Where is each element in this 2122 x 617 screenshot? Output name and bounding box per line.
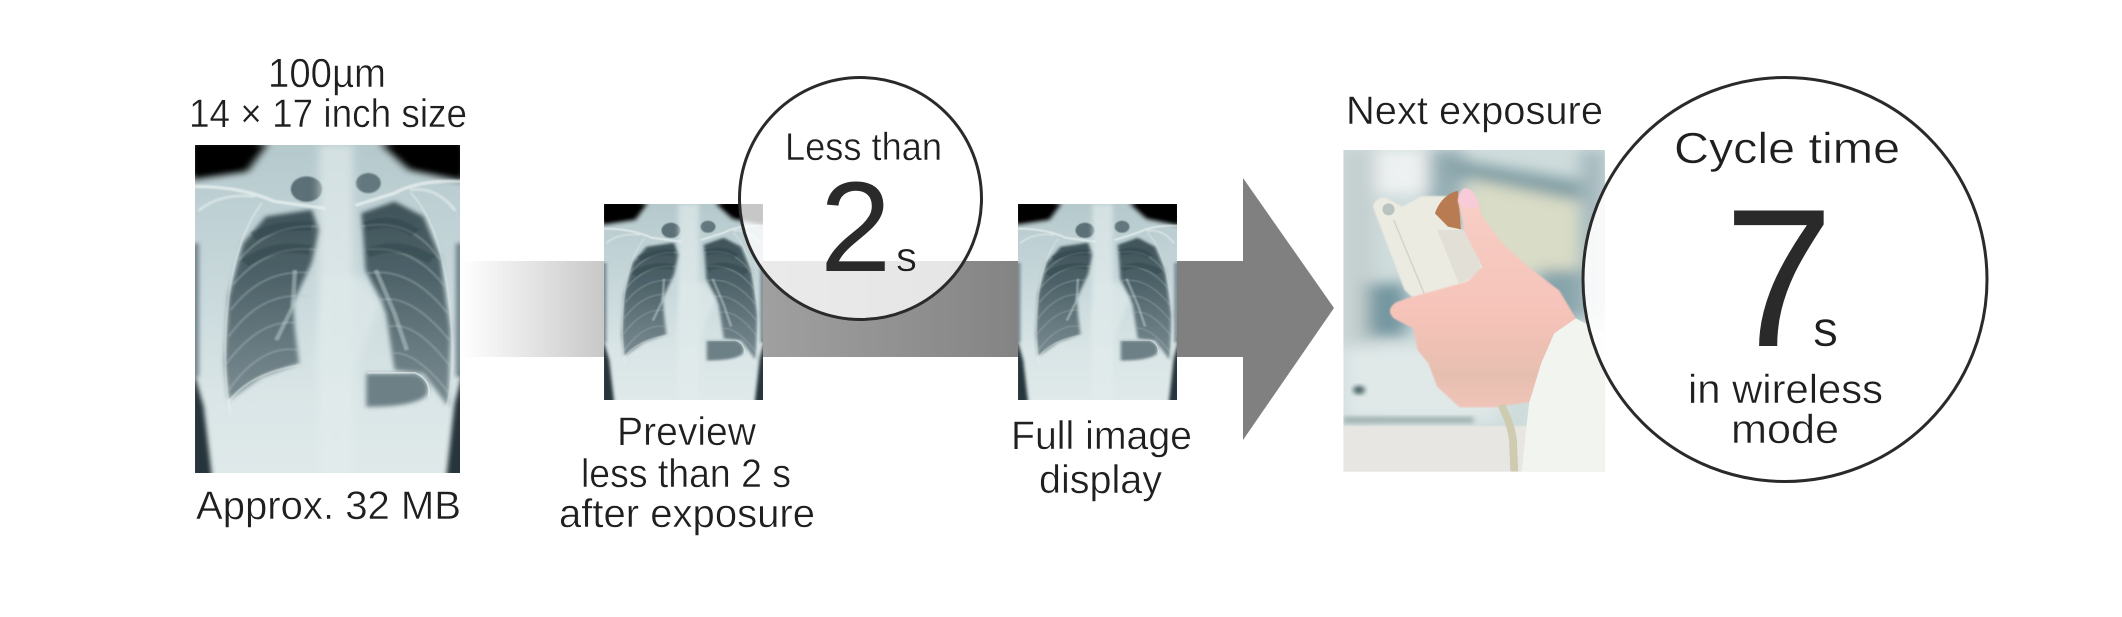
callout: less than 2 s: [740, 78, 982, 320]
callout: less than 2 s: Less than: [785, 126, 942, 169]
callout: cycle time 7 s in wireless mode: [1583, 78, 1987, 482]
image: hand holding wireless exposure switch: [1343, 150, 1605, 472]
callout: cycle time 7 s in wireless mode: in wireless: [1688, 366, 1883, 412]
heading: resolution and size: 14 × 17 inch size: [189, 92, 467, 136]
label: file size: Approx. 32 MB: [196, 484, 461, 528]
callout: cycle time 7 s in wireless mode: s: [1813, 301, 1838, 357]
arrow: progress bar with gradient: [461, 178, 1334, 440]
label: preview: [559, 410, 815, 536]
heading: resolution and size: [189, 50, 467, 136]
callout: cycle time 7 s in wireless mode: Cycle time: [1674, 124, 1900, 173]
callout: cycle time 7 s in wireless mode: mode: [1731, 406, 1839, 452]
label: preview: Preview: [617, 410, 756, 454]
label: full image display: [1011, 414, 1192, 502]
heading: resolution and size: 100µm: [268, 50, 386, 96]
image: full size chest x-ray: [191, 143, 465, 477]
callout: less than 2 s: 2: [820, 156, 891, 299]
hand: [1390, 189, 1576, 407]
detector device: [1373, 196, 1484, 300]
image: full image display chest x-ray: [1016, 203, 1180, 402]
lab coat sleeve: [1522, 318, 1605, 472]
callout: less than 2 s: s: [896, 233, 917, 280]
image: preview chest x-ray: [602, 203, 766, 402]
label: preview: less than 2 s: [581, 452, 791, 496]
cable: [1501, 405, 1514, 472]
label: next exposure: Next exposure: [1346, 89, 1603, 133]
label: full image display: Full image: [1011, 414, 1192, 458]
label: full image display: display: [1039, 458, 1162, 502]
callout: cycle time 7 s in wireless mode: 7: [1724, 168, 1834, 388]
label: preview: after exposure: [559, 492, 815, 536]
